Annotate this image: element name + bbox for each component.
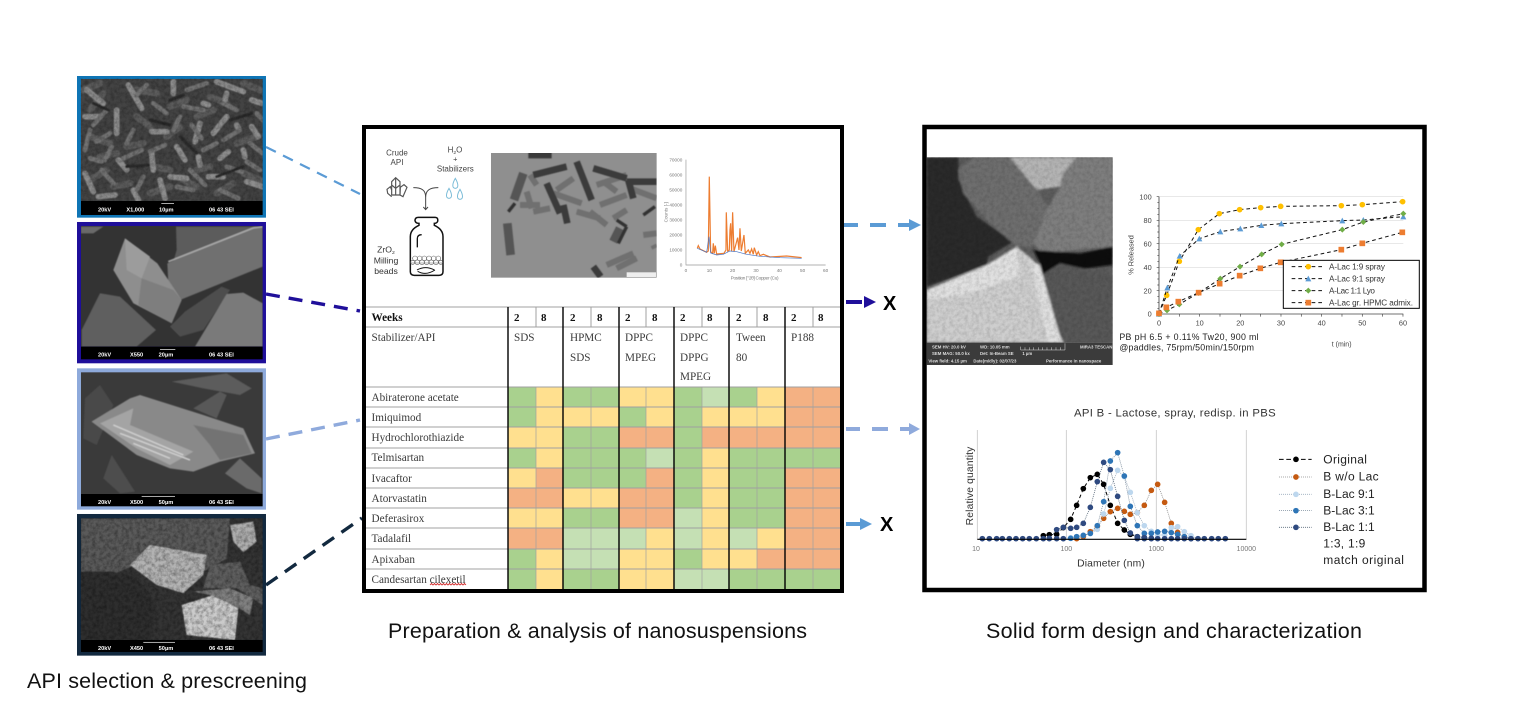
panel: preparation and analysis of nanosuspensions	[364, 127, 842, 591]
stability table: 8	[541, 312, 547, 324]
dissolution chart: PB pH 6.5 + 0.11% Tw20, 900 ml	[1119, 332, 1259, 342]
caption: nanosuspensions: Preparation & analysis of nanosuspensions	[388, 619, 807, 643]
milling schematic: H	[448, 146, 453, 155]
particle size distribution chart: 10	[972, 546, 980, 553]
icon: crystals	[387, 178, 407, 197]
milling schematic	[374, 146, 474, 276]
connector: image 4 to nanosuspension panel	[266, 518, 362, 585]
SEM image 3: layered plate crystal	[77, 368, 266, 510]
dissolution chart: 100	[1139, 192, 1152, 201]
stability table: Hydrochlorothiazide	[372, 432, 464, 444]
dissolution chart: 60	[1144, 239, 1152, 248]
XRD diffractogram: 30000	[669, 217, 683, 222]
XRD diffractogram: 60	[823, 268, 829, 273]
size chart legend: B-Lac 1:1	[1323, 520, 1375, 534]
stability table: Ivacaftor	[372, 473, 412, 485]
XRD diffractogram: Counts [-]	[663, 202, 668, 222]
stability table: Imiquimod	[372, 412, 422, 424]
SEM image 4: aggregated rough particles: X450	[130, 646, 143, 652]
milling schematic: Milling	[374, 255, 398, 265]
size chart legend: match original	[1323, 553, 1404, 567]
icon: water drops	[446, 178, 462, 199]
stability table: Apixaban	[372, 554, 415, 566]
particle size distribution chart	[965, 408, 1404, 570]
milling schematic: beads	[374, 266, 398, 276]
particle size distribution chart: 1000	[1149, 546, 1164, 553]
stability table: Atorvastatin	[372, 493, 427, 505]
dissolution chart: % Released	[1127, 235, 1136, 275]
XRD diffractogram: 40	[777, 268, 782, 273]
stability table: 8	[597, 312, 603, 324]
size chart legend: B w/o Lac	[1323, 470, 1379, 484]
stability table: 2	[625, 312, 631, 324]
XRD diffractogram: 70000	[669, 157, 683, 162]
stability table: 2	[791, 312, 797, 324]
size chart legend: 1:3, 1:9	[1323, 537, 1366, 551]
SEM of solid particle: View field: 4.15 µm	[928, 358, 967, 363]
stability table: Abiraterone acetate	[372, 392, 459, 404]
SEM of solid particle: MIRA3 TESCAN	[1080, 344, 1112, 349]
caption: solid form: Solid form design and characterization	[986, 619, 1362, 643]
excluded mark X lower: X	[880, 514, 894, 536]
connector: image 2 to nanosuspension panel	[266, 294, 360, 311]
SEM image 1: needle crystals	[77, 76, 266, 218]
SEM image 3: layered plate crystal: 20kV	[98, 500, 111, 506]
milling schematic: Crude	[386, 149, 408, 158]
XRD diffractogram: 10	[707, 268, 712, 273]
SEM of solid particle: SEM MAG: 50.0 kx	[932, 351, 970, 356]
stability table: Tween	[736, 332, 766, 344]
dissolution chart: 60	[1399, 318, 1407, 327]
XRD diffractogram: 50000	[669, 187, 683, 192]
SEM of solid particle: WD: 10.05 mm	[980, 344, 1010, 349]
dissolution legend: A-Lac 1:9 spray	[1329, 262, 1386, 271]
size chart legend: B-Lac 3:1	[1323, 503, 1375, 517]
stability table: 2	[680, 312, 686, 324]
dissolution chart: 20	[1144, 286, 1152, 295]
size chart legend	[1279, 452, 1404, 567]
SEM of solid particle: Date(m/d/y): 02/07/23	[973, 358, 1017, 363]
dissolution legend: A-Lac 9:1 spray	[1329, 274, 1386, 283]
stability table: Deferasirox	[372, 513, 425, 525]
dissolution chart: 20	[1236, 318, 1244, 327]
dissolution chart: 80	[1144, 216, 1152, 225]
milling schematic: ZrO	[377, 244, 392, 254]
stability table: MPEG	[680, 371, 711, 383]
panel: solid form design and characterization	[924, 127, 1424, 590]
dissolution chart: t (min)	[1332, 342, 1352, 349]
table row: Tadalafil	[508, 528, 840, 549]
stability table: HPMC	[570, 332, 602, 344]
SEM image 1: needle crystals: 20kV	[98, 207, 111, 213]
stability table: SDS	[570, 352, 591, 364]
dissolution chart: 40	[1144, 263, 1152, 272]
SEM image 4: aggregated rough particles: 06 43 SEI	[209, 646, 234, 652]
table row: Apixaban	[508, 549, 840, 569]
connector: image 1 to nanosuspension panel	[266, 147, 360, 194]
stability table: Weeks	[372, 312, 403, 324]
dissolution chart	[1119, 192, 1419, 353]
table row: Hydrochlorothiazide	[508, 427, 840, 448]
connector: image 3 to nanosuspension panel	[266, 420, 360, 439]
milling schematic: O	[456, 146, 462, 155]
size chart legend: Original	[1323, 452, 1367, 466]
dissolution chart: 10	[1196, 318, 1204, 327]
XRD diffractogram: 60000	[669, 172, 683, 177]
SEM of solid particle: Performance in nanospace	[1046, 358, 1102, 363]
XRD diffractogram: 10000	[669, 247, 683, 252]
SEM image 1: needle crystals: 06 43 SEI	[209, 207, 234, 213]
particle size distribution chart: 100	[1060, 546, 1072, 553]
milling schematic: 2	[392, 250, 395, 256]
size chart legend: B-Lac 9:1	[1323, 487, 1375, 501]
SEM image 4: aggregated rough particles: 50µm	[159, 646, 173, 652]
stability table: 8	[763, 312, 769, 324]
stability table	[366, 307, 840, 589]
dissolution chart: 50	[1358, 318, 1366, 327]
arrow: to solid form, lower	[846, 423, 920, 435]
SEM image 1: needle crystals: X1,000	[126, 207, 144, 213]
excluded mark X upper: X	[883, 293, 897, 315]
dissolution legend: A-Lac 1:1 Lyo	[1329, 286, 1375, 295]
SEM of solid particle: Det: In-Beam SE	[980, 351, 1014, 356]
stability table: Stabilizer/API	[372, 332, 436, 344]
arrow: to exclusion, dark	[846, 296, 876, 308]
caption: API selection: API selection & prescreening	[27, 669, 307, 693]
dissolution legend	[1283, 260, 1419, 308]
stability table: 2	[736, 312, 742, 324]
table row: Imiquimod	[508, 407, 840, 427]
particle size distribution chart: Diameter (nm)	[1077, 559, 1145, 570]
stability table: DPPC	[680, 332, 708, 344]
dissolution chart: @paddles, 75rpm/50min/150rpm	[1119, 343, 1254, 353]
milling schematic: Stabilizers	[437, 165, 474, 174]
particle size distribution chart: 10000	[1237, 546, 1256, 553]
SEM image 1: needle crystals: 10µm	[159, 207, 174, 213]
particle size distribution chart: Relative quantity	[965, 446, 976, 525]
particle size distribution chart: API B - Lactose, spray, redisp. in PBS	[1074, 408, 1276, 420]
stability table: 80	[736, 352, 748, 364]
stability table: SDS	[514, 332, 535, 344]
milling schematic: API	[391, 158, 403, 167]
SEM image 4: aggregated rough particles	[77, 514, 266, 656]
stability table: DPPG	[680, 352, 709, 364]
SEM image 4: aggregated rough particles: 20kV	[98, 646, 111, 652]
stability table: 8	[652, 312, 658, 324]
dissolution chart: 30	[1277, 318, 1285, 327]
table row: Telmisartan	[508, 448, 840, 468]
SEM of solid particle: SEM HV: 20.0 kV	[932, 344, 966, 349]
XRD diffractogram: 20000	[669, 232, 683, 237]
SEM image 3: layered plate crystal: 06 43 SEI	[209, 500, 234, 506]
XRD diffractogram: 0	[685, 268, 688, 273]
stability table: Telmisartan	[372, 452, 425, 464]
XRD diffractogram: 20	[730, 268, 736, 273]
SEM image 2: large faceted crystals: 06 43 SEI	[209, 353, 234, 359]
stability table: DPPC	[625, 332, 653, 344]
arrow: to exclusion, blue	[846, 518, 872, 530]
SEM image 2: large faceted crystals: 20kV	[98, 353, 111, 359]
stability table: MPEG	[625, 352, 656, 364]
table row: Atorvastatin	[508, 488, 840, 508]
table row: Deferasirox	[508, 508, 840, 528]
table row: Ivacaftor	[508, 468, 840, 488]
SEM image 3: layered plate crystal: X500	[130, 500, 143, 506]
dissolution chart: 0	[1148, 310, 1152, 319]
SEM image 3: layered plate crystal: 50µm	[159, 500, 173, 506]
stability table: 2	[570, 312, 576, 324]
dissolution chart: 40	[1318, 318, 1326, 327]
table row: Candesartan cilexetil	[508, 569, 840, 589]
dissolution legend: A-Lac gr. HPMC admix.	[1329, 298, 1413, 307]
table row: Abiraterone acetate	[508, 387, 840, 407]
milling schematic: 2	[453, 150, 456, 156]
XRD diffractogram: 50	[800, 268, 806, 273]
SEM of solid particle: 1 µm	[1022, 351, 1032, 356]
dissolution chart: 0	[1157, 318, 1161, 327]
SEM of solid particle	[927, 157, 1113, 365]
arrow: to solid form, upper	[844, 219, 921, 231]
XRD diffractogram: 0	[680, 262, 683, 267]
stability table: 8	[707, 312, 713, 324]
icon: milling vial	[410, 217, 443, 275]
XRD diffractogram	[663, 157, 829, 280]
XRD diffractogram: Position [°2θ] Copper (Cu)	[731, 275, 779, 280]
stability table: 2	[514, 312, 520, 324]
stability table: P188	[791, 332, 814, 344]
stability table: Candesartan cilexetil	[372, 574, 466, 586]
XRD diffractogram: 40000	[669, 202, 683, 207]
arrow: mix into vial	[413, 188, 438, 210]
XRD diffractogram: 30	[753, 268, 759, 273]
milling schematic: +	[453, 155, 457, 164]
stability table: 8	[818, 312, 824, 324]
stability table: Tadalafil	[372, 533, 411, 545]
TEM micrograph	[491, 153, 657, 278]
SEM image 2: large faceted crystals: 20µm	[159, 353, 173, 359]
SEM image 2: large faceted crystals: X550	[130, 353, 143, 359]
SEM image 2: large faceted crystals	[77, 222, 266, 363]
